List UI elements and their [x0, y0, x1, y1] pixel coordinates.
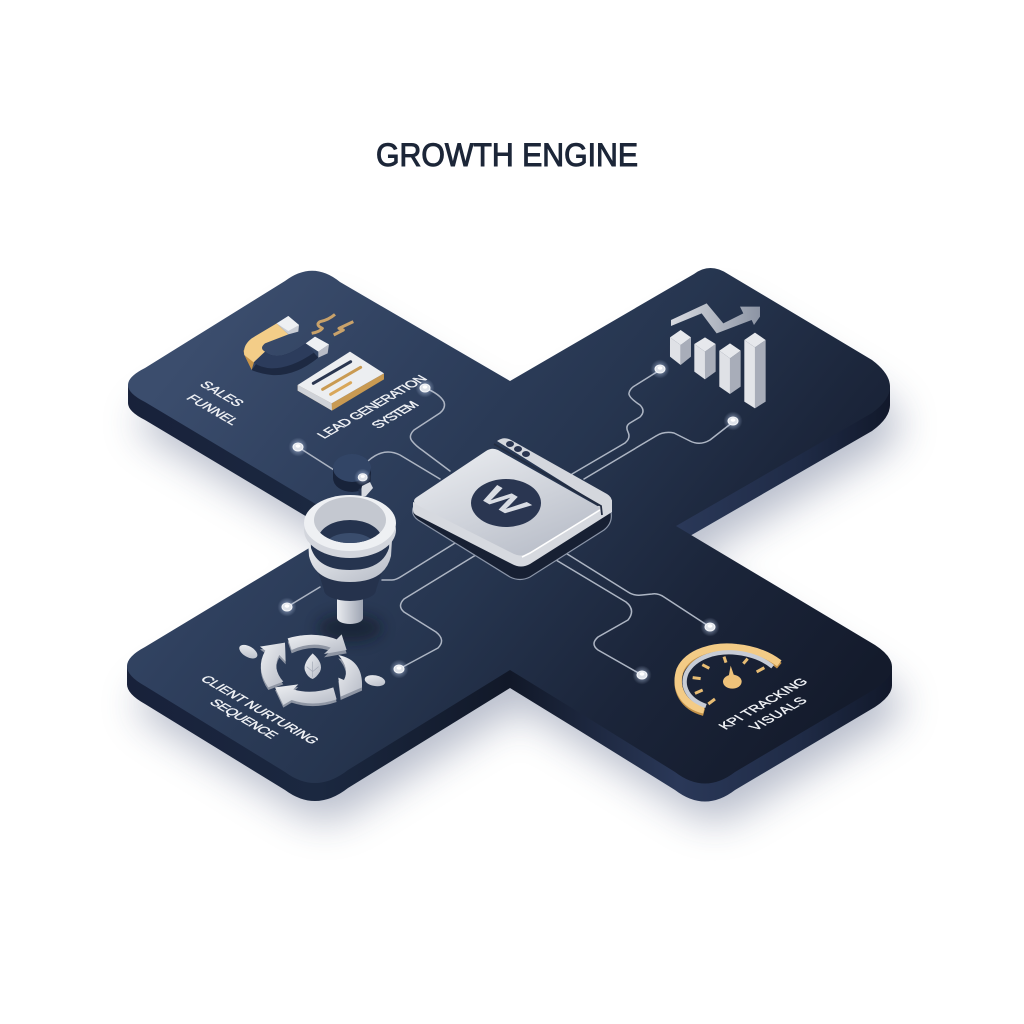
card face [414, 449, 601, 556]
icon: document card [298, 352, 384, 411]
navy arm [252, 343, 318, 375]
lightning sparks [312, 314, 335, 333]
card thickness [413, 500, 612, 566]
magnet tips [277, 316, 299, 334]
inner silver ring [685, 652, 773, 706]
bar 3 [719, 343, 741, 394]
window title bar [497, 438, 612, 515]
central window card [413, 438, 612, 580]
icon: magnet [243, 314, 353, 375]
label: sales funnel: FUNNEL [183, 392, 243, 427]
arrow bottom [275, 684, 337, 708]
icon: nurturing cycle [237, 634, 386, 708]
leaves [237, 642, 386, 688]
bar 4 [744, 333, 766, 408]
title: GROWTH ENGINE [376, 137, 638, 173]
label: KPI tracking visuals: VISUALS [746, 695, 811, 733]
label: client nurturing sequence: SEQUENCE [206, 697, 282, 741]
label: sales funnel [183, 379, 247, 427]
circuit lines [287, 370, 733, 675]
bar 2 [694, 337, 716, 379]
white band [308, 540, 392, 582]
label: KPI tracking visuals: KPI TRACKING [715, 676, 811, 732]
label: sales funnel: SALES [196, 379, 247, 409]
funnel rim [304, 502, 396, 558]
icon: bar chart with arrow [670, 303, 766, 408]
label: client nurturing sequence: CLIENT NURTURING [197, 673, 323, 746]
platform: cross-shaped base [127, 268, 902, 822]
lower dark cone [316, 565, 384, 601]
logo letter: W [470, 482, 538, 521]
label: lead generation system: LEAD GENERATION [314, 373, 431, 441]
icon: funnel [304, 495, 396, 624]
arrow left [260, 643, 286, 690]
gold arm [243, 350, 254, 370]
bar 1 [670, 330, 691, 365]
funnel stem [337, 590, 363, 624]
connector nodes [278, 360, 742, 684]
trend arrow [671, 303, 760, 333]
arrow right [338, 655, 362, 700]
gauge ticks [693, 657, 764, 704]
gauge rim [678, 649, 779, 712]
window dots [506, 441, 530, 457]
gauge needle [728, 666, 735, 678]
upper dark band [310, 530, 390, 570]
arrow top [288, 634, 347, 657]
funnel shadow [318, 614, 382, 642]
label: lead generation system: SYSTEM [368, 399, 422, 431]
card shadow plate [413, 508, 611, 580]
icon: small dark disc [333, 454, 373, 505]
icon: KPI gauge [678, 647, 779, 712]
logo circle [471, 479, 541, 527]
